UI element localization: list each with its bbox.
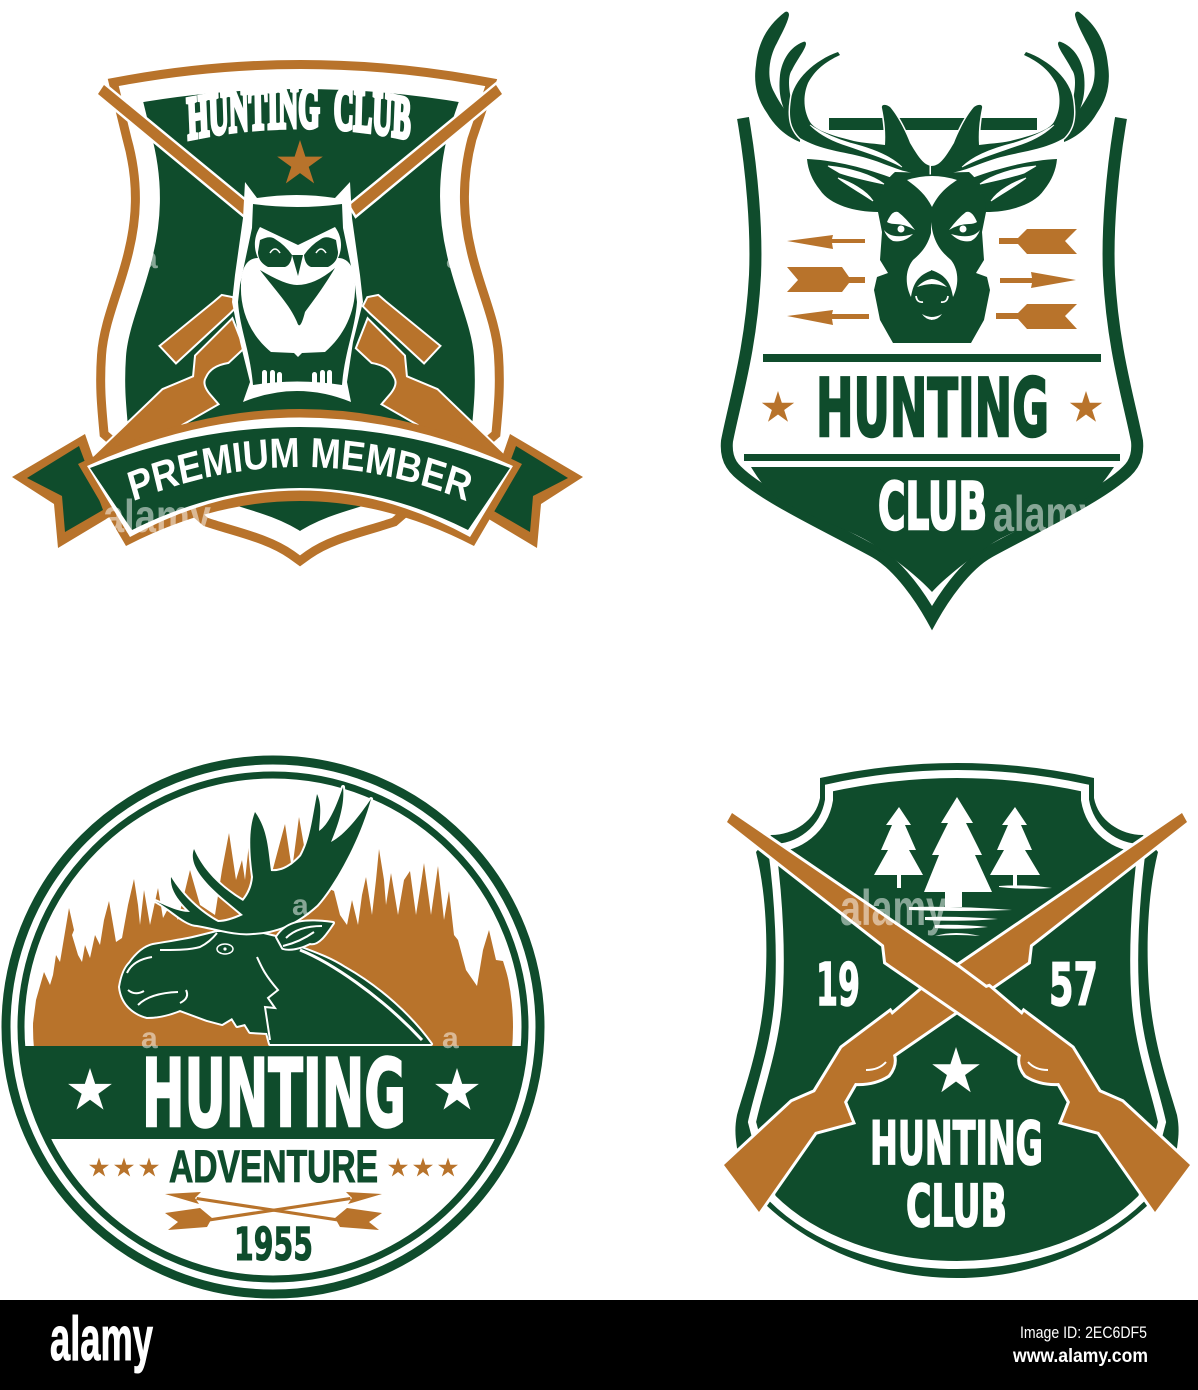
year: 57: 57 <box>1049 950 1098 1019</box>
moose head and neck <box>120 932 431 1044</box>
shield: rifles badge <box>735 763 1179 1278</box>
badge: moose hunting adventure <box>0 760 546 1294</box>
icon: left small stars <box>89 1158 159 1176</box>
outer ring <box>6 760 540 1294</box>
watermark: alamy <box>840 880 947 936</box>
icon: left star <box>762 391 794 422</box>
rule lines <box>744 354 1120 461</box>
ribbon: premium member <box>78 409 522 546</box>
owl eyes <box>258 237 338 267</box>
shield white band <box>115 79 485 543</box>
icon: right small stars <box>388 1158 458 1176</box>
rifle barrels <box>98 85 502 215</box>
nose stripe <box>907 222 933 297</box>
icon: star <box>932 1047 980 1092</box>
icon: owl <box>232 182 363 402</box>
footer bar <box>0 1300 1198 1390</box>
rifle stocks and scopes <box>88 296 512 462</box>
watermark: alamy <box>103 490 211 542</box>
icon: right star <box>1070 391 1102 422</box>
heading: hunting club <box>186 89 411 142</box>
ear streaks <box>828 166 884 201</box>
year: 19: 19 <box>816 950 860 1019</box>
year: 1955: 1955 <box>234 1218 313 1271</box>
icon: deer head <box>755 12 1109 343</box>
forehead patch <box>907 176 957 207</box>
shield: owl badge <box>115 79 485 543</box>
shield inner line <box>752 774 1162 1265</box>
moose antler <box>155 787 371 933</box>
icon: pine trees <box>874 797 1052 936</box>
inner ring <box>21 775 525 1279</box>
left half of deer <box>755 12 933 343</box>
arrows: right <box>996 229 1077 329</box>
forest skyline <box>30 817 520 1046</box>
icon: right white star <box>435 1068 479 1110</box>
rifle: upper layer <box>727 813 1190 1212</box>
crossed arrows <box>165 1192 382 1230</box>
website: www.alamy.com <box>1012 1346 1148 1367</box>
shield outline: deer badge <box>727 118 1137 618</box>
lower green field <box>751 467 1114 592</box>
owl beak <box>292 255 303 276</box>
owl white silhouette <box>232 182 363 402</box>
green band <box>0 1046 546 1139</box>
owl face and belly <box>241 227 355 357</box>
owl toes <box>262 370 332 387</box>
trigger guard details <box>866 1062 1048 1070</box>
footer logo: alamy <box>50 1305 153 1374</box>
icon: star <box>277 140 323 183</box>
ribbon: right tail <box>482 434 583 548</box>
moose details <box>127 926 422 1040</box>
arrows: left <box>787 235 869 325</box>
ribbon: premium member: PREMIUM MEMBER <box>127 438 471 502</box>
watermark letters: a <box>446 242 463 275</box>
watermark letters: a <box>141 1022 158 1055</box>
moose ear <box>277 921 333 949</box>
antler streak <box>810 125 902 167</box>
watermark letters <box>141 242 463 275</box>
top bar <box>829 118 1037 130</box>
icon: left white star <box>68 1068 112 1110</box>
watermark letters: a <box>442 1022 459 1055</box>
right half of deer <box>931 12 1109 343</box>
watermark: alamy <box>993 486 1100 542</box>
ribbon: left tail <box>12 434 113 548</box>
heading: hunting club: HUNTING CLUB <box>186 89 411 142</box>
heading: club: CLUB <box>878 470 987 545</box>
owl bib <box>260 268 335 325</box>
owl green interior <box>238 204 357 385</box>
heading: hunting: HUNTING <box>142 1040 406 1149</box>
eye <box>884 212 915 241</box>
rifle: lower layer <box>724 813 1187 1212</box>
badge: crossed rifles hunting club <box>724 763 1190 1278</box>
badge: owl premium member <box>12 60 583 566</box>
heading: hunting: HUNTING <box>870 1109 1043 1179</box>
watermark letters: a <box>292 889 309 922</box>
heading: club: CLUB <box>906 1172 1007 1240</box>
image id: Image ID: 2EC6DF5 <box>1020 1323 1147 1342</box>
watermark letters <box>141 889 459 1055</box>
subheading: adventure: ADVENTURE <box>169 1141 378 1192</box>
watermark letters: a <box>141 242 158 275</box>
icon: moose <box>120 787 431 1044</box>
badge: deer hunting club <box>727 12 1137 618</box>
